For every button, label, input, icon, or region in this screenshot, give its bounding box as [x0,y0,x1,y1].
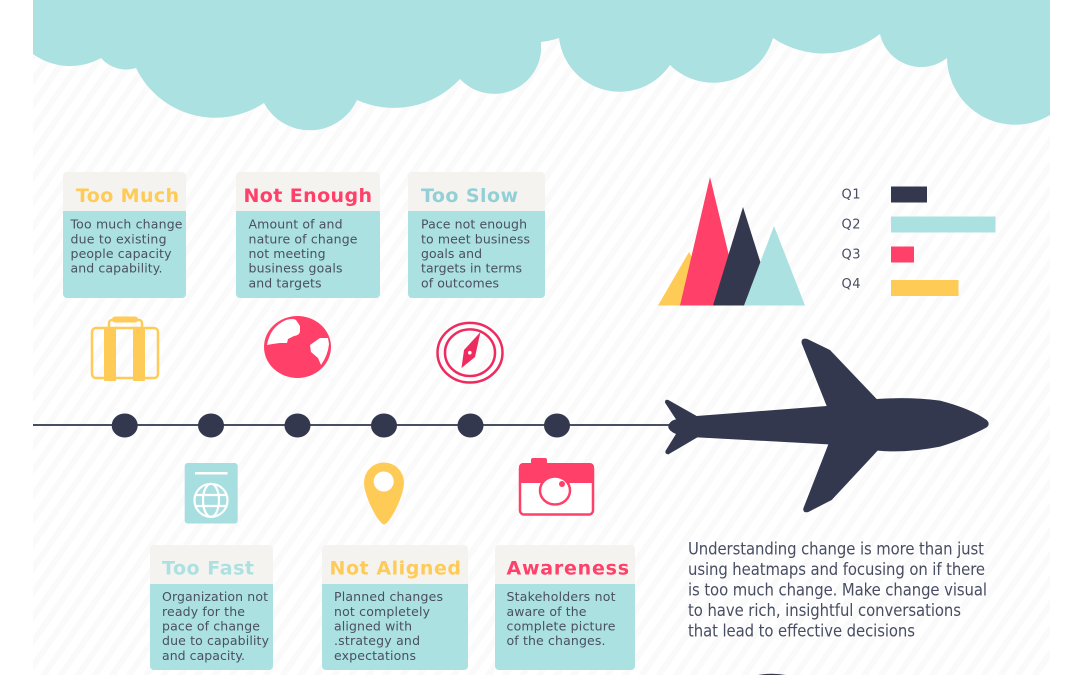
text block: summary paragraph: to have rich, insightful conversations [688,601,961,620]
text: Too Slow description: goals and [421,246,482,261]
chart: quarterly bars: Q1 [842,188,860,202]
text: Awareness description: of the changes. [506,633,606,648]
cloud banner [33,0,1050,130]
text block: summary paragraph [688,540,987,640]
heading: Not Aligned: Not Aligned [330,558,461,580]
timeline [33,414,680,438]
chart: quarterly bars: Q4 [842,277,860,292]
icon: globe [264,316,331,378]
heading: Too Fast: Too Fast [162,558,254,580]
text: Too Fast description: ready for the [162,604,245,619]
text: Not Aligned description: not completely [334,604,431,619]
text block: summary paragraph: Understanding change is more than just [688,540,984,558]
text: Too Fast description: and capacity. [162,648,245,663]
panel: Too Fast [150,545,273,670]
panel: Awareness [495,545,635,670]
text: Too Much description: people capacity [70,246,172,261]
partial circle at bottom edge [758,674,786,675]
text: Not Aligned description: .strategy and [334,633,420,648]
heading: Too Slow: Too Slow [421,185,518,207]
icon: suitcase [92,316,158,381]
text block: summary paragraph: that lead to effective decisions [688,622,915,640]
panel: Too Slow [408,172,545,298]
text: Not Enough description: Amount of and [248,216,342,232]
panel: Not Aligned [322,545,468,670]
text: Too Slow description: targets in terms [421,260,522,276]
text: Not Enough description: and targets [248,276,322,290]
text: Awareness description [506,589,616,648]
text: Too Much description: and capability. [70,260,162,276]
chart: triangles [658,177,805,306]
text: Too Fast description: Organization not [162,589,268,604]
text: Too Fast description: due to capability [162,633,270,648]
text: Too Much description: due to existing [70,232,166,246]
heading: Not Enough: Not Enough [244,185,372,207]
text: Not Enough description: not meeting [248,246,326,261]
text: Too Much description [70,216,183,276]
chart: quarterly bars: Q2 [842,218,860,232]
text: Too Slow description [421,216,530,290]
text: Awareness description: Stakeholders not [506,589,616,604]
text: Not Aligned description [334,589,443,663]
text: Awareness description: complete picture [506,618,616,634]
panel: Too Much [63,172,186,298]
chart: quarterly bars: Q3 [842,248,860,262]
icon: map pin [364,462,404,524]
text block: summary paragraph: using heatmaps and focusing on if there [688,560,985,579]
text: Not Aligned description: aligned with [334,618,412,634]
icon: compass [438,323,502,383]
text: Too Slow description: Pace not enough [421,216,527,232]
text: Too Slow description: to meet business [421,232,530,246]
chart: quarterly bars [842,186,996,296]
text: Not Aligned description: Planned changes [334,589,443,604]
icon: airplane [665,339,989,512]
text: Not Aligned description: expectations [334,648,416,663]
text: Not Enough description: nature of change [248,232,358,246]
text: Too Fast description [162,589,270,663]
text: Not Enough description [248,216,358,290]
text: Not Enough description: business goals [248,260,342,276]
text: Awareness description: aware of the [506,604,587,619]
text: Too Fast description: pace of change [162,618,260,634]
panel: Not Enough [236,172,380,298]
text: Too Slow description: of outcomes [421,276,499,290]
icon: passport [185,463,238,524]
heading: Too Much: Too Much [76,185,179,207]
heading: Awareness: Awareness [506,558,629,580]
text block: summary paragraph: is too much change. Make change visual [688,580,987,600]
text: Too Much description: Too much change [70,216,183,232]
icon: camera [519,458,594,514]
